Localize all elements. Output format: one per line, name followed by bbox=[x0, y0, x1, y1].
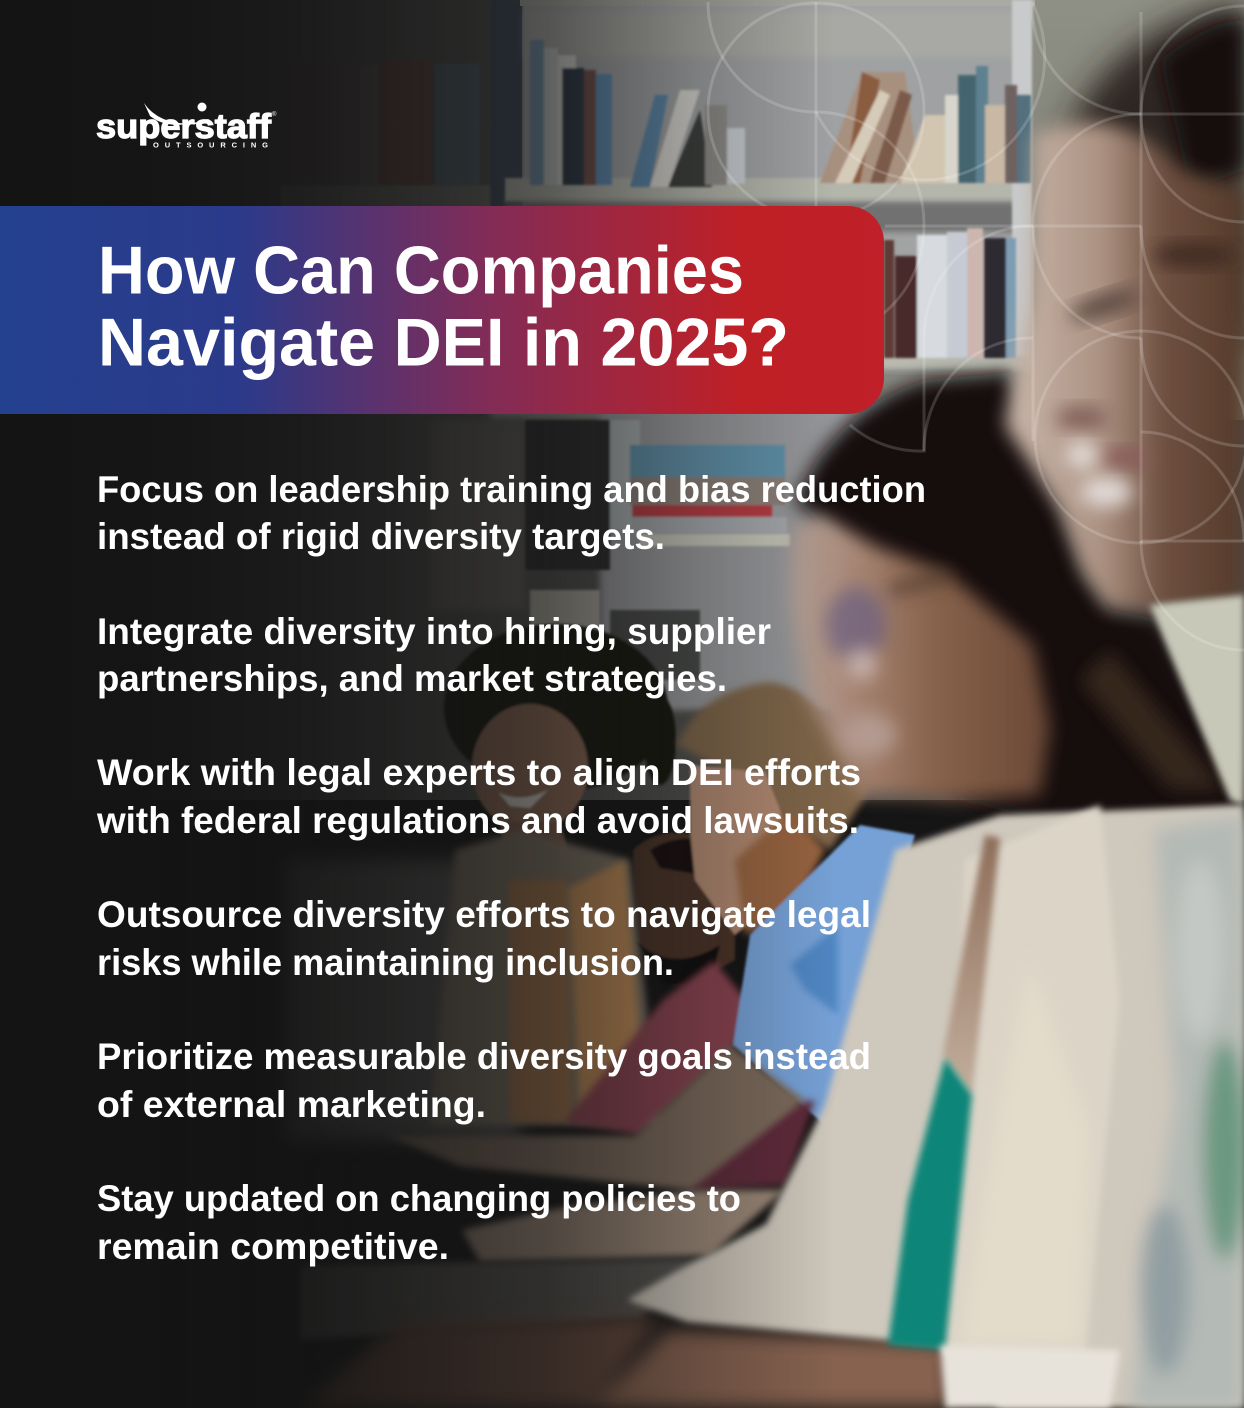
eye bbox=[1067, 283, 1143, 327]
title banner bbox=[0, 206, 884, 414]
nose shadow bbox=[1056, 406, 1108, 430]
books on lower shelf bbox=[884, 228, 1016, 358]
item 1: instead of rigid diversity targets. bbox=[97, 516, 665, 557]
smiling woman in foreground bbox=[1005, 0, 1244, 805]
hair bbox=[795, 373, 1244, 825]
item 1 bbox=[97, 469, 926, 557]
item 6: remain competitive. bbox=[97, 1226, 449, 1267]
glasses bbox=[826, 575, 950, 679]
item 1: Focus on leadership training and bias reduction bbox=[97, 469, 926, 510]
chest bbox=[943, 835, 1000, 1095]
item 6: Stay updated on changing policies to bbox=[97, 1178, 741, 1219]
colleague: man in glasses at far left bbox=[285, 860, 520, 1140]
title banner: Navigate DEI in 2025? bbox=[98, 304, 789, 380]
item 4: Outsource diversity efforts to navigate legal bbox=[97, 894, 871, 935]
logo: SuperStaff Outsourcing bbox=[96, 102, 277, 150]
table bbox=[300, 1258, 714, 1340]
lips bbox=[1101, 448, 1149, 468]
teeth bbox=[1066, 441, 1132, 507]
books on upper shelf bbox=[530, 40, 1031, 187]
logo swoosh bbox=[144, 103, 211, 125]
banner background bbox=[0, 206, 884, 414]
item 2: Integrate diversity into hiring, supplier bbox=[97, 611, 771, 652]
floral sleeve bbox=[1130, 815, 1244, 1408]
woman with glasses bbox=[627, 373, 1244, 1408]
back group of colleagues bbox=[285, 624, 915, 1340]
bookshelf wall bbox=[0, 0, 1244, 800]
face bbox=[1005, 123, 1244, 610]
item 6 bbox=[97, 1178, 741, 1267]
item 3: Work with legal experts to align DEI efforts bbox=[97, 752, 861, 793]
blazer bbox=[627, 805, 1244, 1408]
colleague: curly-haired woman bbox=[430, 624, 676, 1125]
face bbox=[790, 515, 1050, 800]
hands in foreground bbox=[300, 1316, 950, 1408]
teal top bbox=[888, 1058, 972, 1350]
item 4: risks while maintaining inclusion. bbox=[97, 942, 674, 983]
colleague: forearm on table bbox=[386, 1045, 805, 1190]
orange scarf bbox=[509, 880, 572, 1122]
item 5: of external marketing. bbox=[97, 1084, 486, 1125]
item 5 bbox=[97, 1036, 871, 1125]
registered mark: ® bbox=[272, 111, 277, 118]
title text: How Can Companies bbox=[98, 232, 744, 308]
logo dot bbox=[198, 102, 206, 112]
dim books on far-left shelf bbox=[285, 60, 480, 185]
smile bbox=[840, 713, 896, 757]
item 4 bbox=[97, 894, 871, 983]
neck and collar bbox=[1150, 595, 1244, 805]
item 2: partnerships, and market strategies. bbox=[97, 658, 727, 699]
colleague: red-haired man in blue shirt bbox=[677, 682, 915, 1125]
cuff bbox=[940, 1345, 1120, 1408]
recommendations list bbox=[96, 469, 926, 1267]
geometric line-art overlay bbox=[708, 2, 1244, 650]
hand on table bbox=[462, 1190, 785, 1262]
hair highlight bbox=[1080, 650, 1225, 790]
hair bbox=[1070, 0, 1244, 360]
colleague: red shirt beneath arm bbox=[690, 1100, 815, 1190]
item 5: Prioritize measurable diversity goals instead bbox=[97, 1036, 871, 1077]
item 3 bbox=[96, 752, 861, 841]
blouse inner bbox=[960, 960, 1090, 1345]
logo wordmark: superstaff bbox=[96, 108, 272, 146]
item 2 bbox=[97, 611, 771, 699]
colleague: man in red shirt bbox=[564, 832, 750, 1135]
logo tagline: OUTSOURCING bbox=[153, 140, 268, 150]
item 3: with federal regulations and avoid lawsuits. bbox=[96, 800, 859, 841]
mid-room shelves bbox=[430, 420, 790, 680]
